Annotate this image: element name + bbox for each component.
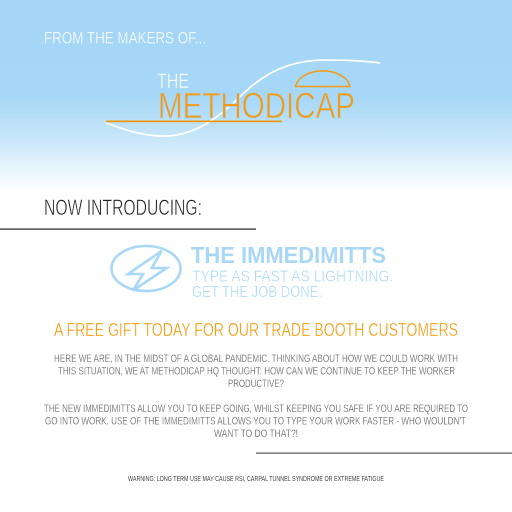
body paragraph 2 <box>44 403 468 440</box>
divider top <box>0 228 256 230</box>
logo underline <box>106 120 282 122</box>
tagline: from the makers of: FROM THE MAKERS OF... <box>44 28 206 48</box>
logo: the methodicap <box>106 60 380 136</box>
product tagline line 1: TYPE AS FAST AS LIGHTNING. <box>192 268 393 286</box>
product name: THE IMMEDIMITTS <box>191 242 386 268</box>
sky gradient header background <box>0 0 512 192</box>
icon: lightning bolt in ellipse <box>112 246 180 291</box>
divider bottom <box>256 452 512 454</box>
logo word: the: THE <box>157 70 189 93</box>
body paragraph 1: PRODUCTIVE? <box>228 378 284 390</box>
heading: now introducing: NOW INTRODUCING: <box>44 195 202 220</box>
icon: cap <box>296 71 350 86</box>
body paragraph 1 <box>54 353 458 390</box>
product banner: the immedimitts <box>112 242 393 301</box>
logo swoosh <box>106 60 380 136</box>
body paragraph 2: WANT TO DO THAT?! <box>214 428 298 440</box>
logo word: methodicap: METHODICAP <box>158 85 355 126</box>
warning footnote: WARNING: LONG TERM USE MAY CAUSE RSI, CARPAL TUNNEL SYNDROME OR EXTREME FATIGUE <box>128 476 384 483</box>
product tagline line 2: GET THE JOB DONE. <box>192 284 322 301</box>
